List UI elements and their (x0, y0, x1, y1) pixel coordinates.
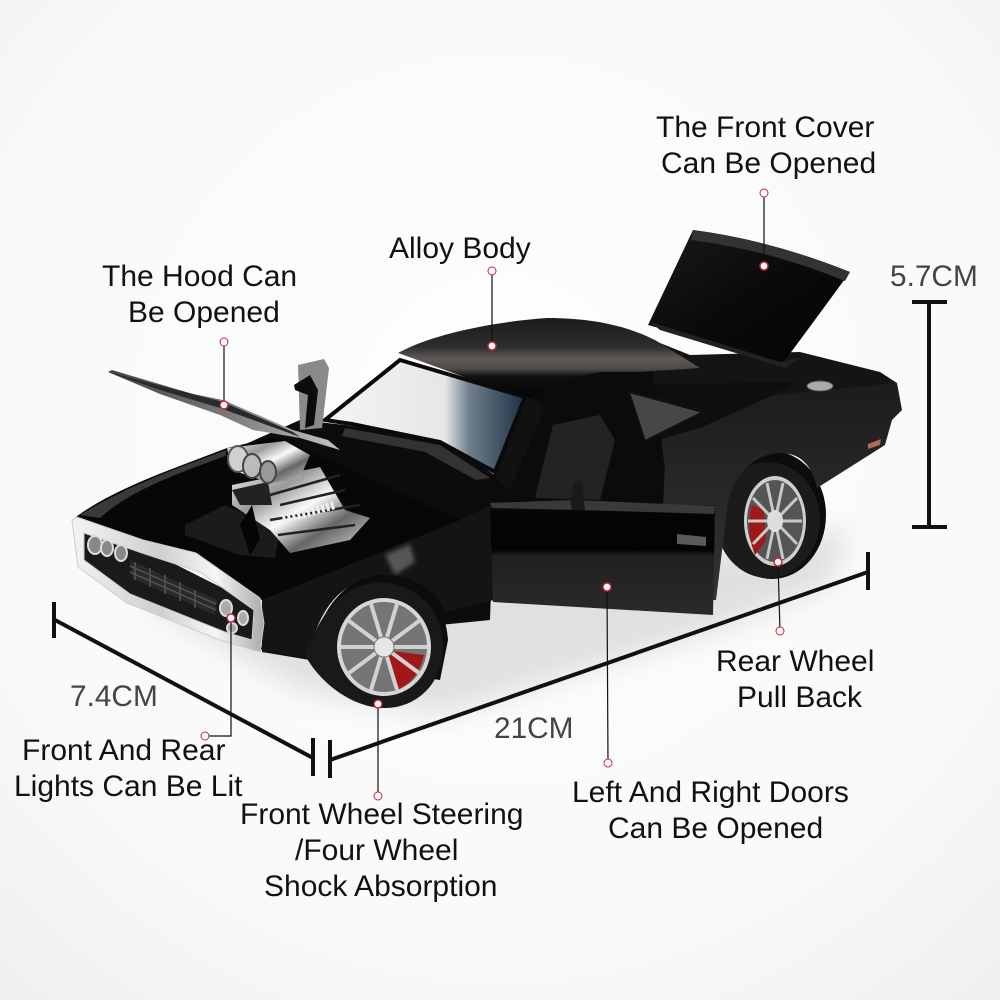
callout: front wheel (374, 700, 382, 800)
front tyre (305, 583, 443, 708)
callout: lights (201, 614, 235, 740)
rear deck glossy top (628, 382, 797, 443)
fender panel (262, 505, 494, 658)
headlights left (88, 536, 127, 561)
label: hood: Be Opened (128, 296, 280, 329)
label: lights: Front And Rear (22, 734, 225, 767)
front side marker (319, 627, 345, 643)
callout: doors (603, 583, 612, 767)
car (72, 230, 902, 708)
width dimension: 7.4CM (54, 602, 313, 776)
open door (490, 480, 715, 615)
label: doors: Left And Right Doors (572, 776, 849, 809)
windshield (325, 360, 525, 472)
callout: hood (220, 338, 228, 409)
ground shadow (140, 530, 850, 715)
dimension label: 5.7CM: 5.7CM (890, 260, 978, 293)
fender reflection (385, 544, 415, 575)
front fascia (77, 525, 262, 650)
rear wheel arch (718, 451, 826, 579)
headlights right (220, 600, 248, 633)
chrome surround (72, 517, 264, 652)
front wheel arch (310, 575, 448, 680)
label: front wheel (240, 798, 523, 903)
height dimension: 5.7CM (912, 302, 947, 527)
dimension label: 21CM: 21CM (494, 712, 573, 745)
label: rear wheel: Rear Wheel (716, 645, 874, 678)
front hood surface (72, 437, 460, 600)
wiper vent grid (342, 428, 490, 480)
label: doors (572, 776, 849, 845)
label: rear wheel (716, 645, 874, 714)
upper rear backing (640, 335, 897, 450)
label: lights (14, 734, 243, 803)
label: front cover (656, 111, 876, 180)
fuel cap (807, 381, 833, 391)
label: front cover: Can Be Opened (661, 147, 876, 180)
label: doors: Can Be Opened (608, 812, 823, 845)
label: front wheel: /Four Wheel (295, 834, 458, 867)
label: front wheel: Front Wheel Steering (240, 798, 523, 831)
label: lights: Lights Can Be Lit (14, 770, 243, 803)
door mirror on open hood side (294, 359, 329, 430)
seat (535, 415, 615, 500)
roof (398, 318, 700, 399)
rear body panel (647, 383, 902, 600)
A pillar (495, 396, 545, 490)
trunk lid open (648, 230, 850, 368)
rear tyre (716, 462, 820, 578)
grille (130, 560, 217, 615)
label: front cover: The Front Cover (656, 111, 874, 144)
dimension label: 7.4CM: 7.4CM (70, 680, 158, 713)
label: alloy body: Alloy Body (389, 232, 531, 265)
callout: front cover (760, 189, 768, 270)
interior backing (488, 350, 665, 505)
label: front wheel: Shock Absorption (264, 870, 497, 903)
callout: alloy body (488, 267, 496, 350)
quarter window (629, 392, 703, 441)
rear side reflector (868, 439, 881, 449)
callout: rear wheel (774, 558, 784, 635)
hood open front (108, 370, 340, 450)
label: hood: The Hood Can (102, 260, 297, 293)
length dimension: 21CM (330, 552, 868, 778)
label: hood (102, 260, 297, 329)
cowl and body mid (232, 420, 495, 660)
label: rear wheel: Pull Back (737, 681, 863, 714)
front wheel rim (337, 598, 431, 696)
hood top highlight (80, 450, 227, 518)
rear wheel rim (744, 476, 806, 566)
engine (185, 441, 370, 558)
